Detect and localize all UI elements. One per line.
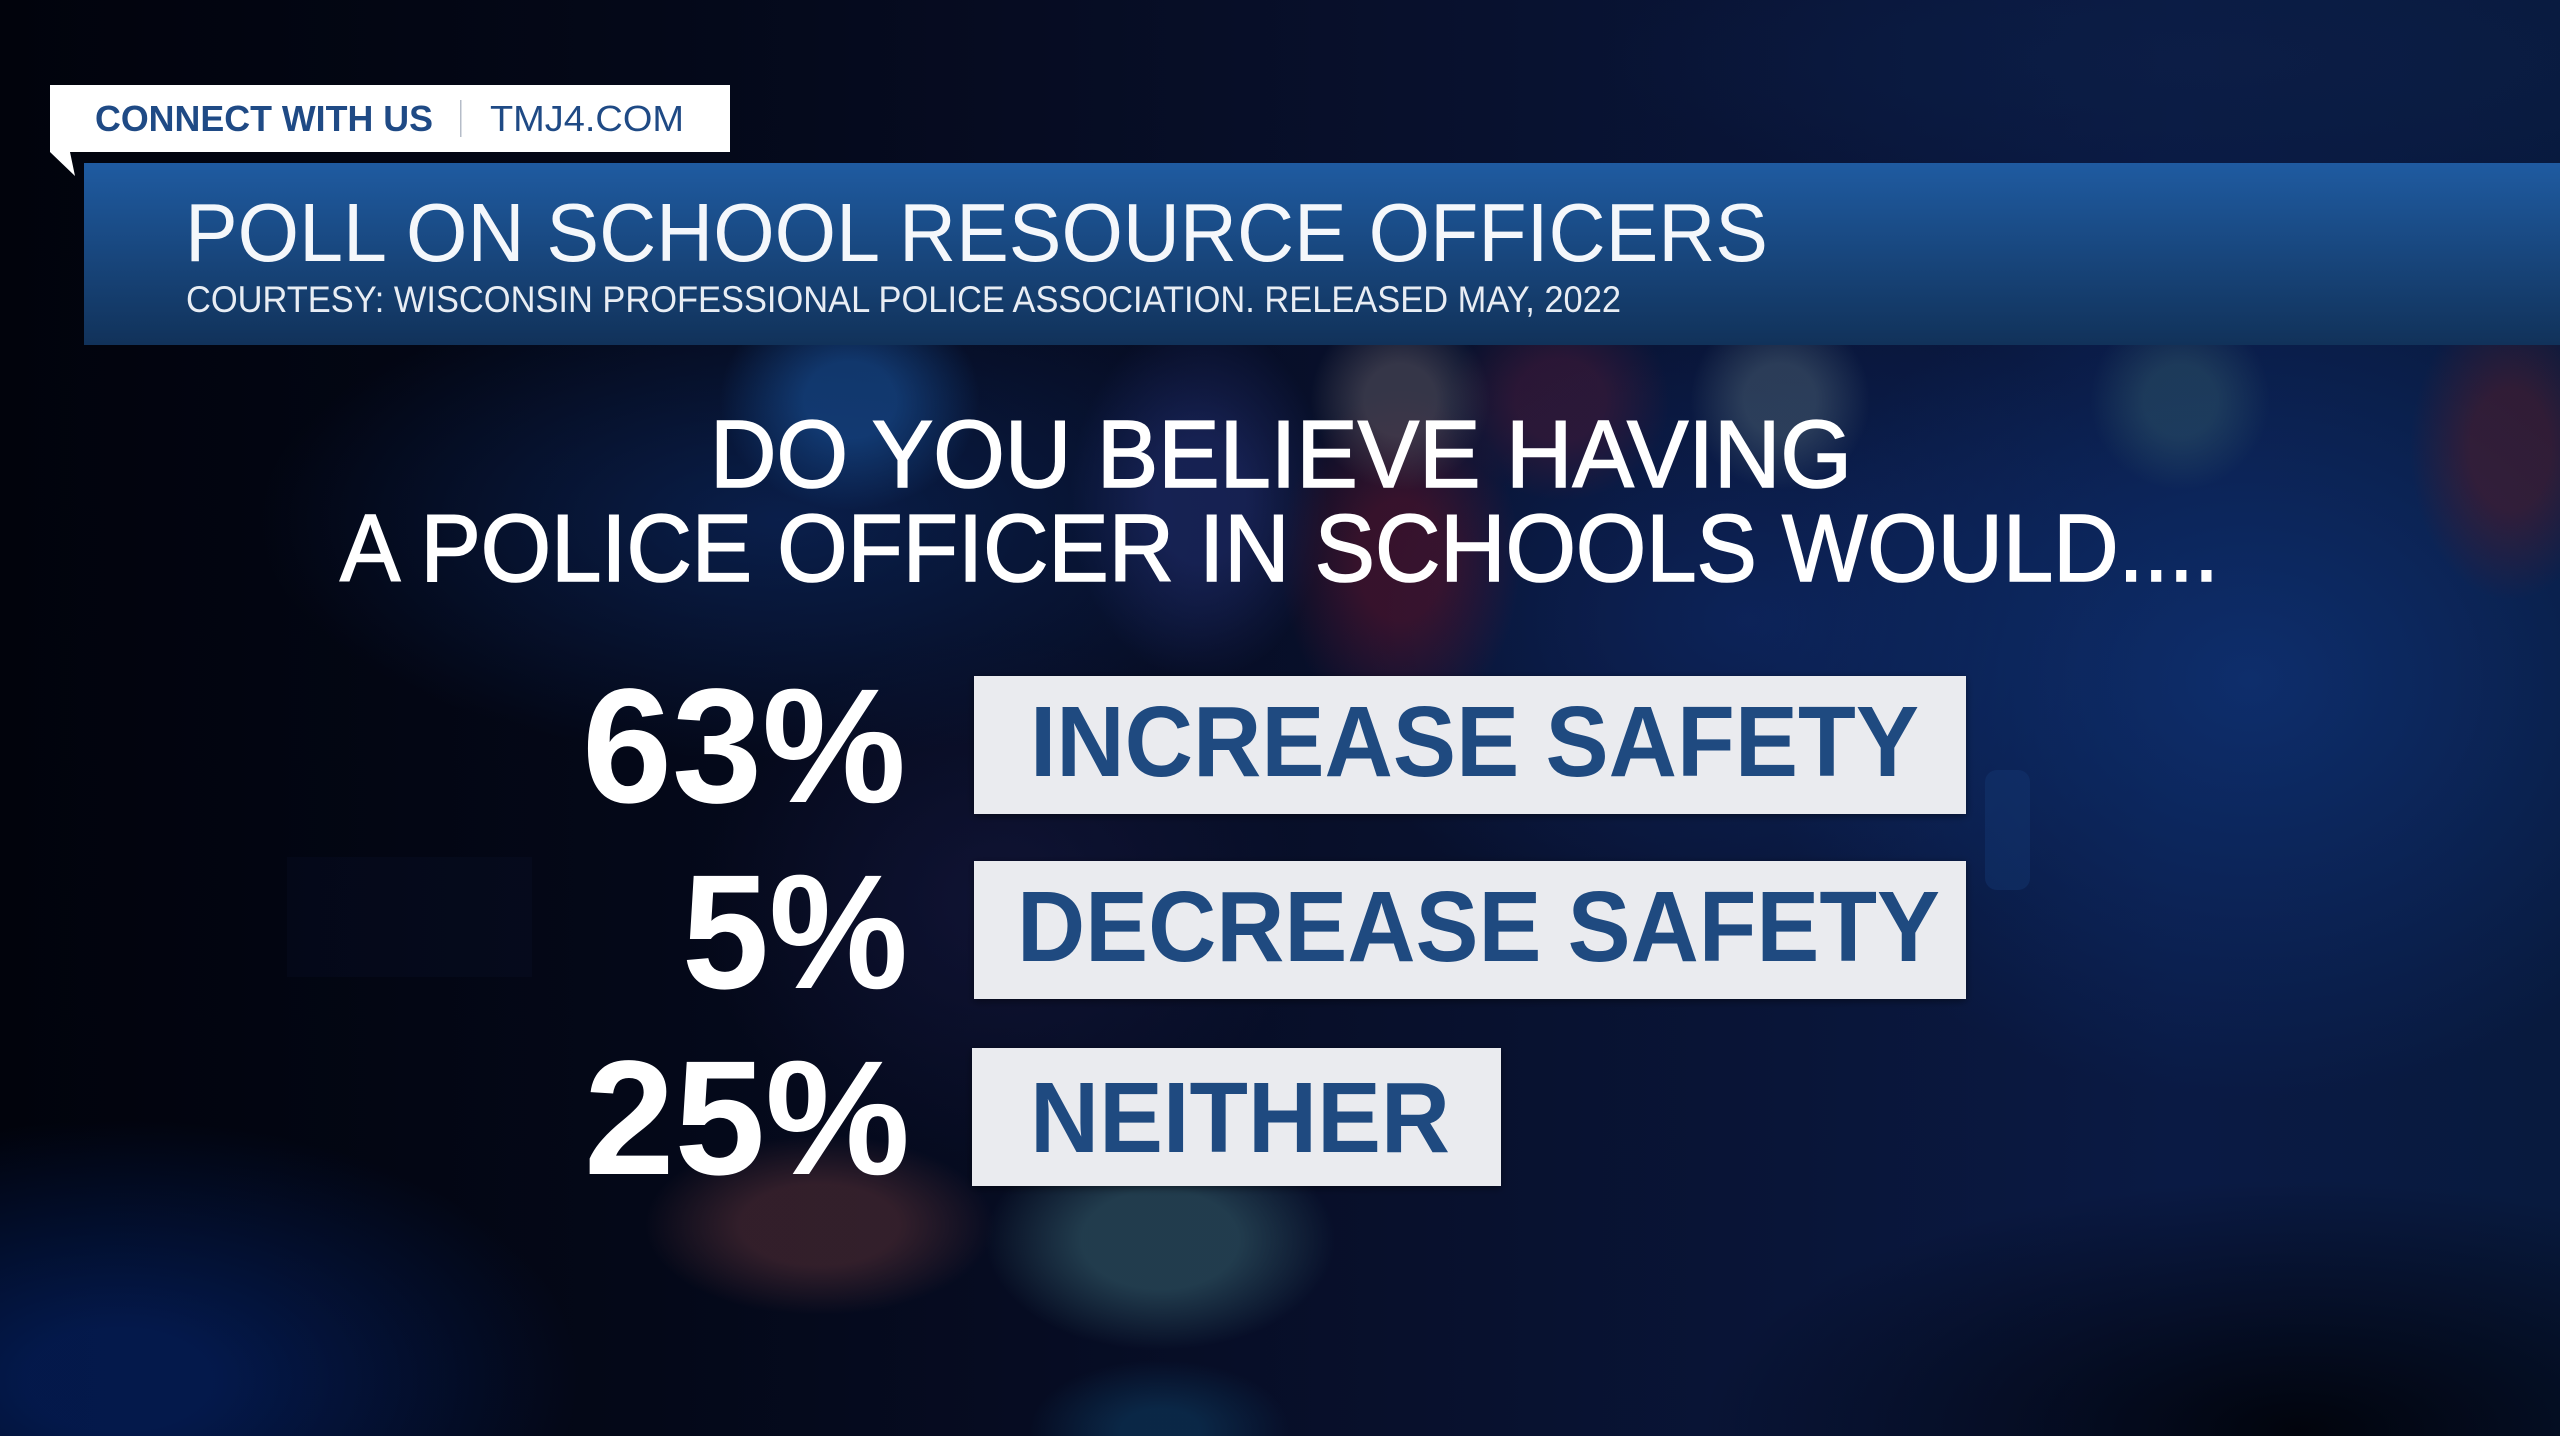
label box: DECREASE SAFETY (1017, 871, 1940, 983)
label box: INCREASE SAFETY (1030, 686, 1919, 798)
header title: POLL ON SCHOOL RESOURCE OFFICERS (185, 186, 1768, 279)
label box: NEITHER (1030, 1062, 1450, 1174)
row: 25% neither (584, 1026, 1501, 1209)
poll question heading: A POLICE OFFICER IN SCHOOLS WOULD.... (340, 495, 2219, 602)
value 63%: 63% (582, 654, 906, 837)
value 25%: 25% (584, 1026, 910, 1209)
website label: TMJ4.COM (490, 98, 684, 139)
label box (972, 1048, 1501, 1186)
connect with us speech tag (50, 85, 730, 176)
value 5%: 5% (682, 840, 908, 1023)
faint car details (287, 770, 2030, 977)
connect label: CONNECT WITH US (95, 98, 433, 139)
header bar (84, 163, 2560, 345)
poll question heading (340, 401, 2219, 602)
poll question heading: DO YOU BELIEVE HAVING (710, 401, 1852, 508)
row: 63% increase safety (582, 654, 1966, 837)
row: 5% decrease safety (682, 840, 1966, 1023)
header source line: COURTESY: WISCONSIN PROFESSIONAL POLICE ASSOCIATION. RELEASED MAY, 2022 (186, 279, 1621, 320)
